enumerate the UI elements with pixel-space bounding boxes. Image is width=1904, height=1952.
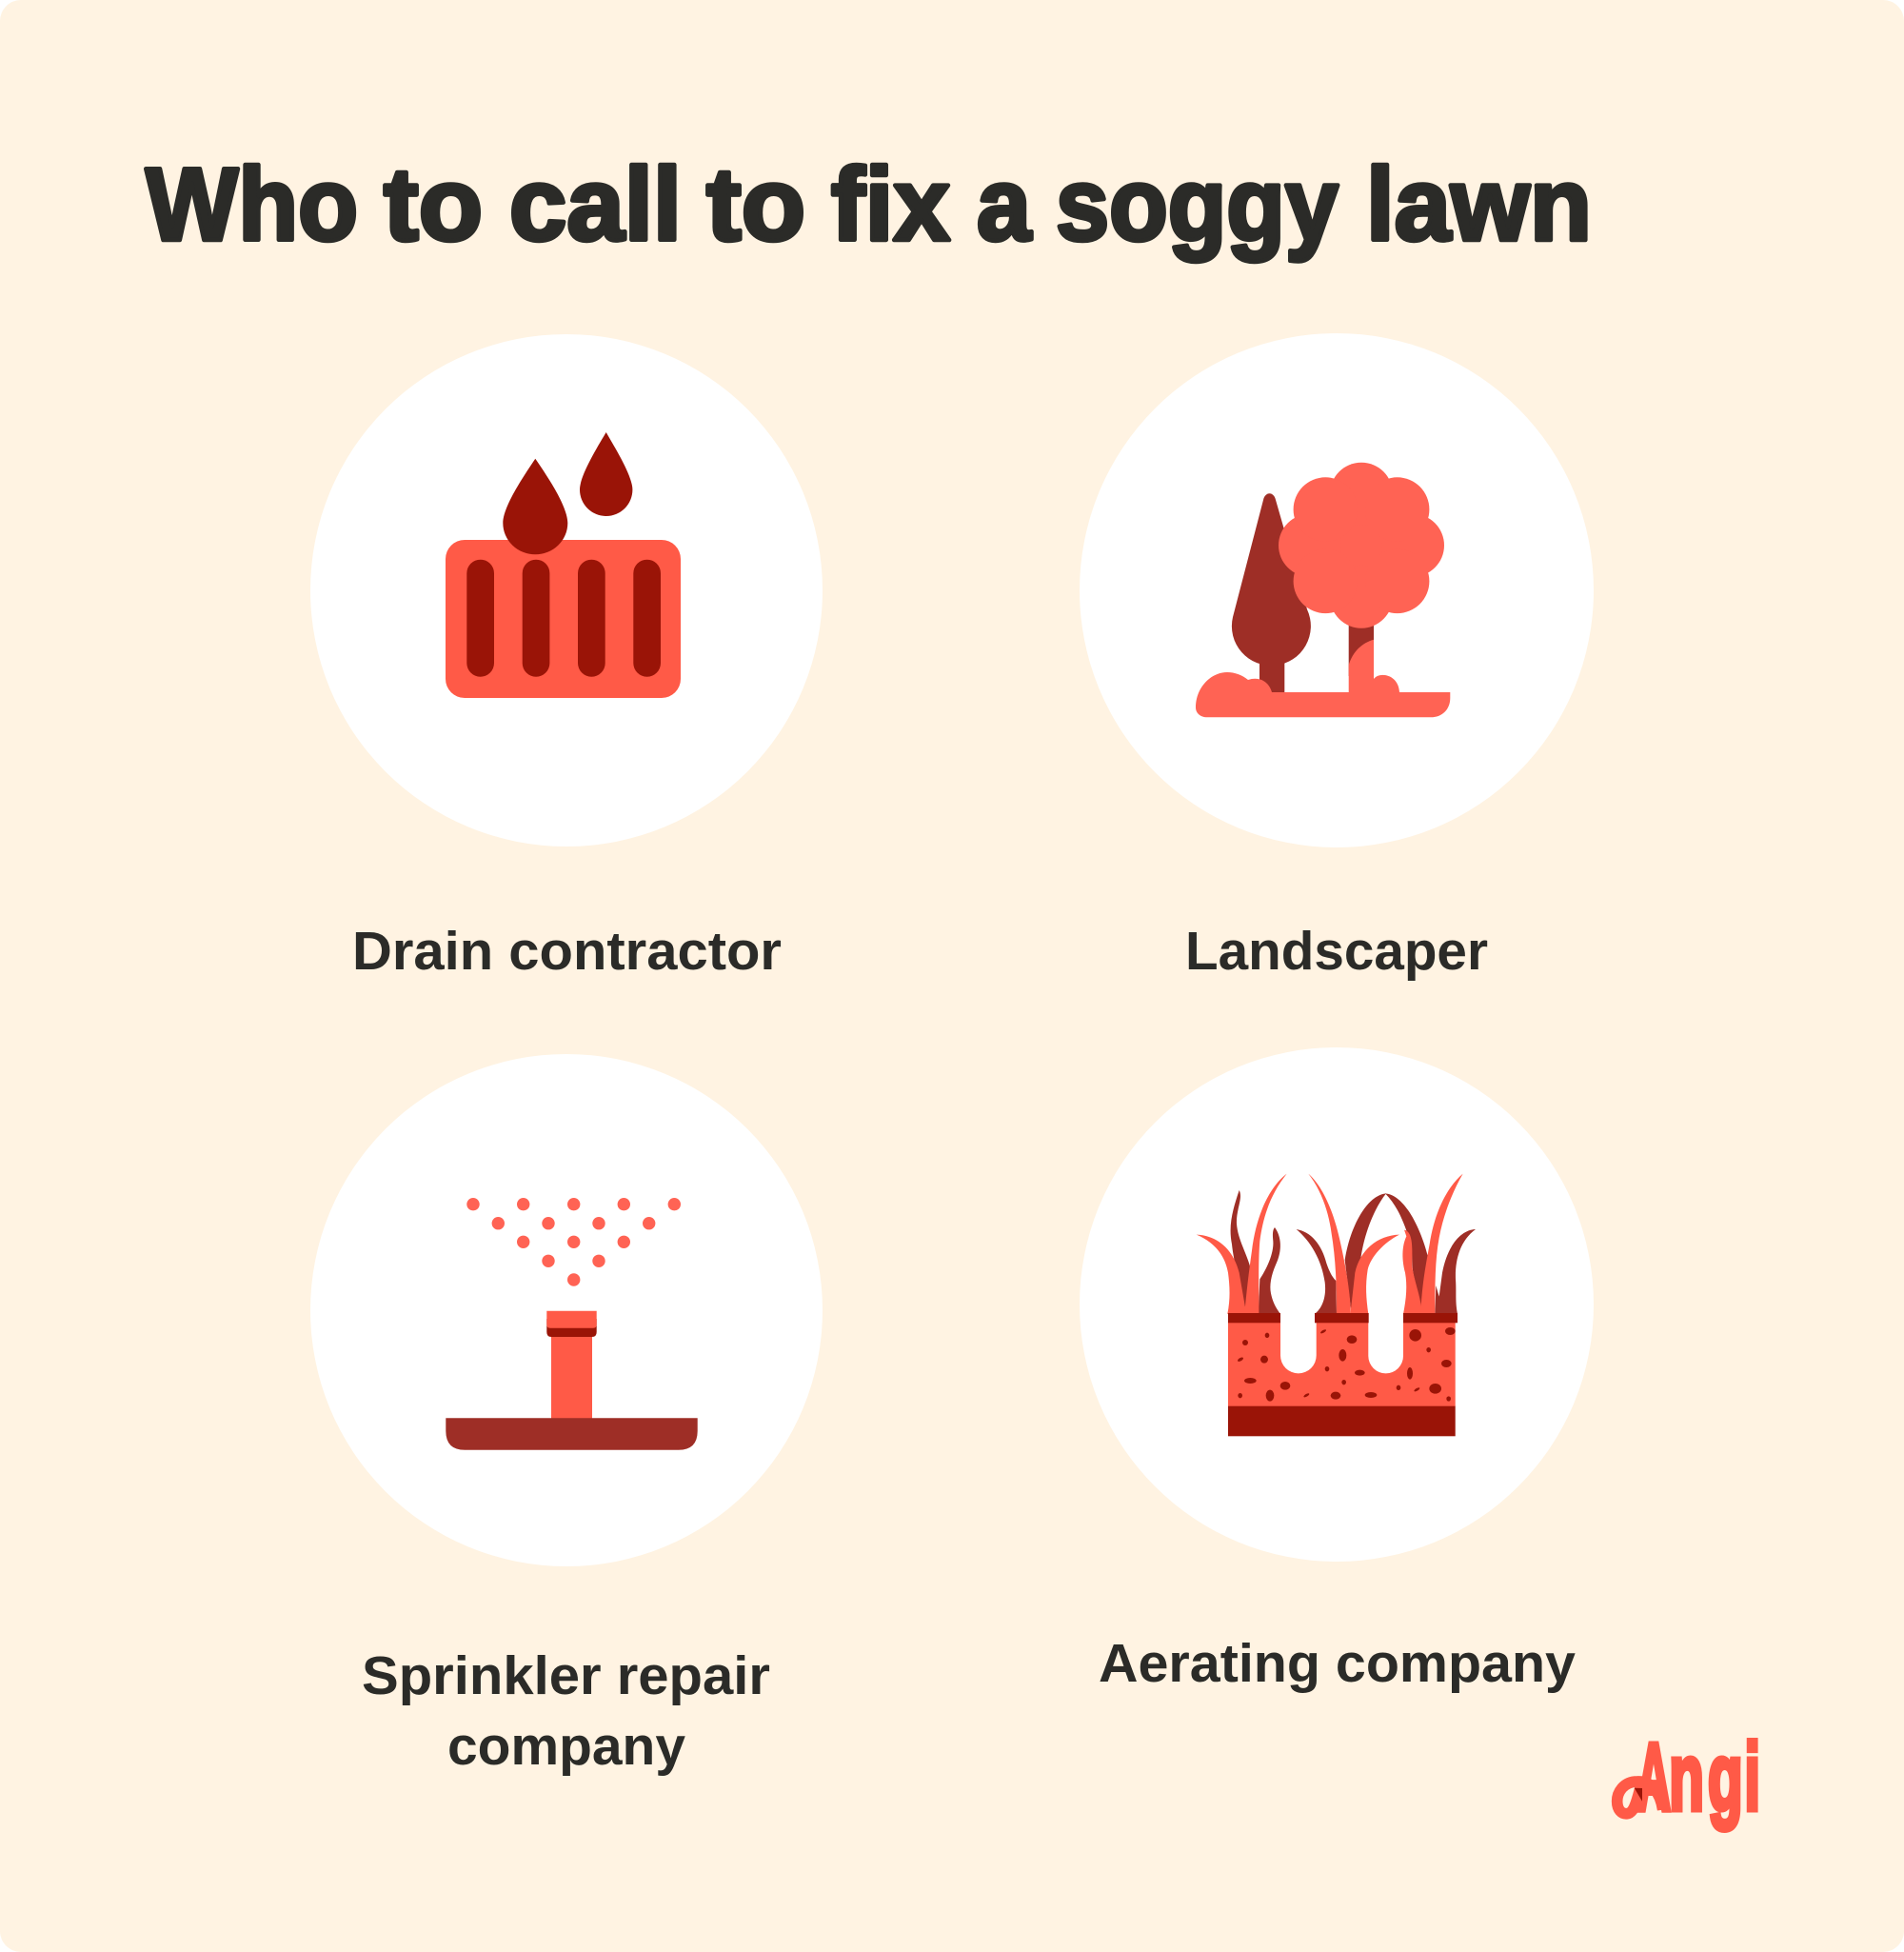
label: Drain contractor — [352, 921, 782, 982]
title: fix — [831, 147, 950, 263]
label: company — [447, 1716, 685, 1777]
title: a — [977, 147, 1032, 263]
icon: aerated soil with grass — [1197, 1174, 1476, 1436]
panel: aerating company — [1080, 1047, 1594, 1694]
panel: drain contractor — [310, 334, 823, 982]
logo wordmark: n — [1669, 1724, 1704, 1831]
white circle — [1080, 1047, 1594, 1562]
icon: trees and ground — [1196, 463, 1450, 717]
logo wordmark: g — [1708, 1724, 1743, 1831]
soil block — [1228, 1319, 1456, 1406]
white circle — [310, 334, 823, 847]
water spray dots — [466, 1198, 681, 1286]
label: Landscaper — [1185, 921, 1488, 982]
icon: drain grate with water drops — [446, 432, 681, 698]
white circle — [310, 1054, 823, 1566]
title: to — [706, 147, 805, 263]
label: Aerating company — [1099, 1633, 1576, 1694]
logo loop shadow — [1635, 1788, 1642, 1802]
title: to — [384, 147, 483, 263]
title: lawn — [1366, 147, 1592, 263]
logo loop — [1617, 1782, 1663, 1814]
white circle — [1080, 333, 1594, 847]
soil specks — [1237, 1327, 1456, 1402]
panel: landscaper — [1080, 333, 1594, 982]
title: soggy — [1056, 147, 1339, 263]
title: Who — [146, 147, 358, 263]
grass blades — [1197, 1174, 1476, 1314]
aeration holes — [1280, 1314, 1317, 1373]
logo wordmark: A — [1636, 1724, 1671, 1831]
label: Sprinkler repair — [362, 1645, 770, 1706]
logo: Angi — [1617, 1724, 1760, 1831]
panel: sprinkler repair company — [310, 1054, 823, 1777]
icon: sprinkler — [446, 1198, 698, 1450]
title: call — [509, 147, 682, 263]
logo wordmark: i — [1744, 1724, 1760, 1831]
